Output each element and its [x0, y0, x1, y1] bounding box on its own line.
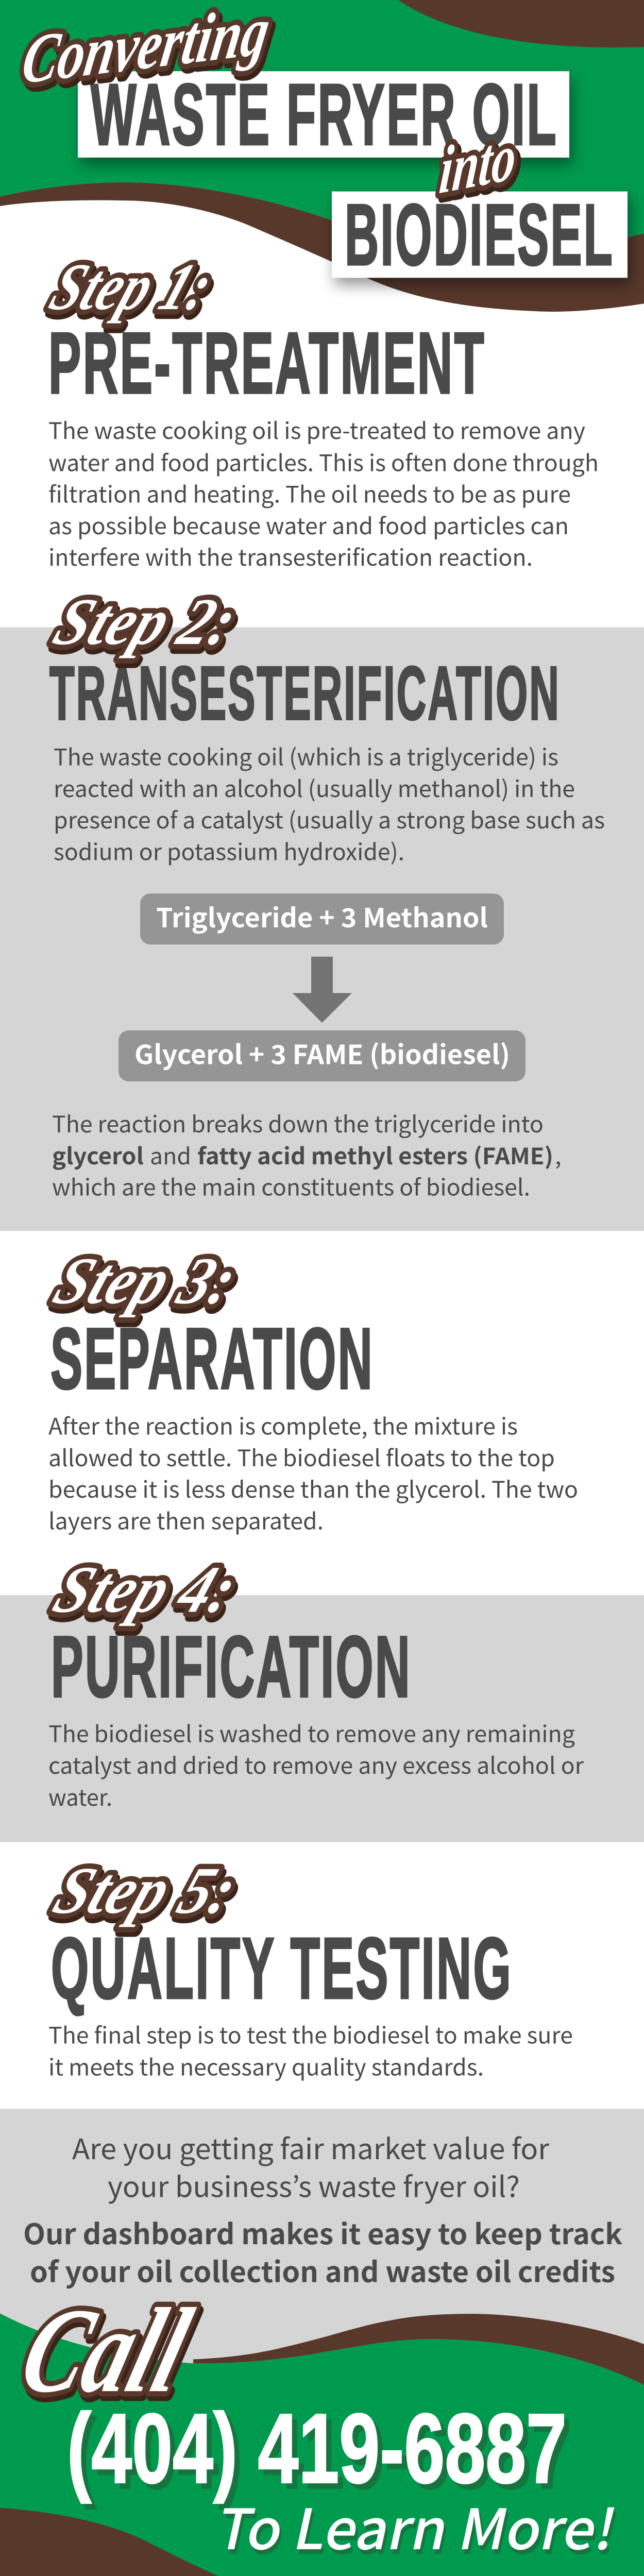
step 3 body text: allowed to settle. The biodiesel floats to the top [48, 1440, 555, 1473]
step 2 closing text: , [555, 1138, 562, 1171]
step 2 script label: Step 2: [44, 585, 247, 659]
footer question: Are you getting fair market value for [72, 2127, 549, 2167]
step 2 intro text: sodium or potassium hydroxide). [54, 834, 404, 867]
step 2 closing text: which are the main constituents of biodiesel. [52, 1169, 530, 1202]
step 4 panel [0, 1553, 644, 1842]
script title: into: into [436, 119, 519, 209]
step 3 body text: because it is less dense than the glycerol. The two [48, 1471, 578, 1504]
footer question: your business’s waste fryer oil? [108, 2164, 520, 2206]
pill: reactants [140, 893, 504, 944]
step 3 body text: layers are then separated. [48, 1503, 324, 1536]
step 5 body text: The final step is to test the biodiesel to make sure [48, 2017, 573, 2050]
script label: call: Call [8, 2284, 204, 2418]
step 2 closing text: and [150, 1138, 191, 1171]
step 4 body text: catalyst and dried to remove any excess alcohol or [48, 1748, 584, 1781]
step 1 body text: as possible because water and food particles can [48, 508, 569, 541]
step 3 body text [48, 1408, 578, 1536]
pill: reactants: Triglyceride + 3 Methanol [156, 897, 488, 935]
step 2 intro text: presence of a catalyst (usually a strong base such as [54, 802, 605, 835]
step 4 body text: water. [48, 1779, 112, 1812]
pill: products [118, 1030, 526, 1081]
step 3 script label: Step 3: [44, 1244, 247, 1318]
step 5 panel [44, 1854, 573, 2082]
step 2 intro text: reacted with an alcohol (usually methanol) in the [54, 771, 575, 804]
pill: products: Glycerol + 3 FAME (biodiesel) [134, 1033, 510, 1072]
step 1 body text: The waste cooking oil is pre-treated to remove any [48, 412, 585, 446]
step 5 script label: Step 5: [44, 1854, 247, 1927]
step 1 script label: Step 1: [41, 250, 223, 324]
step 1 panel [41, 250, 599, 572]
step 2 panel [0, 585, 644, 1231]
step 2 intro text [54, 739, 605, 867]
footer dashboard message [23, 2212, 623, 2290]
footer question [72, 2127, 549, 2206]
footer dashboard message: Our dashboard makes it easy to keep track [23, 2212, 623, 2252]
call to action: to learn more: To Learn More! [210, 2485, 625, 2565]
step 1 body text: interfere with the transesterification reaction. [48, 539, 533, 572]
arrow: reaction direction [293, 957, 352, 1023]
step 3 panel [44, 1244, 578, 1536]
step 1 body text [48, 412, 599, 572]
footer dashboard message: of your oil collection and waste oil credits [30, 2249, 615, 2290]
header panel [0, 0, 644, 312]
step 5 body text [48, 2017, 573, 2082]
step 2 closing text: fatty acid methyl esters (FAME) [197, 1138, 553, 1171]
footer panel [0, 2109, 644, 2576]
step 3 body text: After the reaction is complete, the mixture is [48, 1408, 518, 1441]
step 2 closing text: glycerol [52, 1138, 144, 1171]
step 4 body text: The biodiesel is washed to remove any remaining [48, 1716, 575, 1749]
step 2 closing text: The reaction breaks down the triglyceride into [52, 1106, 544, 1139]
step 2 intro text: The waste cooking oil (which is a triglyceride) is [54, 739, 558, 772]
step 1 body text: water and food particles. This is often done through [48, 445, 599, 478]
step 1 body text: filtration and heating. The oil needs to be as pure [48, 476, 571, 509]
step 5 body text: it meets the necessary quality standards. [48, 2049, 484, 2082]
step 4 script label: Step 4: [44, 1553, 247, 1626]
step 3 heading: SEPARATION [50, 1311, 374, 1408]
step 2 closing text [52, 1106, 562, 1202]
step 4 body text [48, 1716, 584, 1812]
